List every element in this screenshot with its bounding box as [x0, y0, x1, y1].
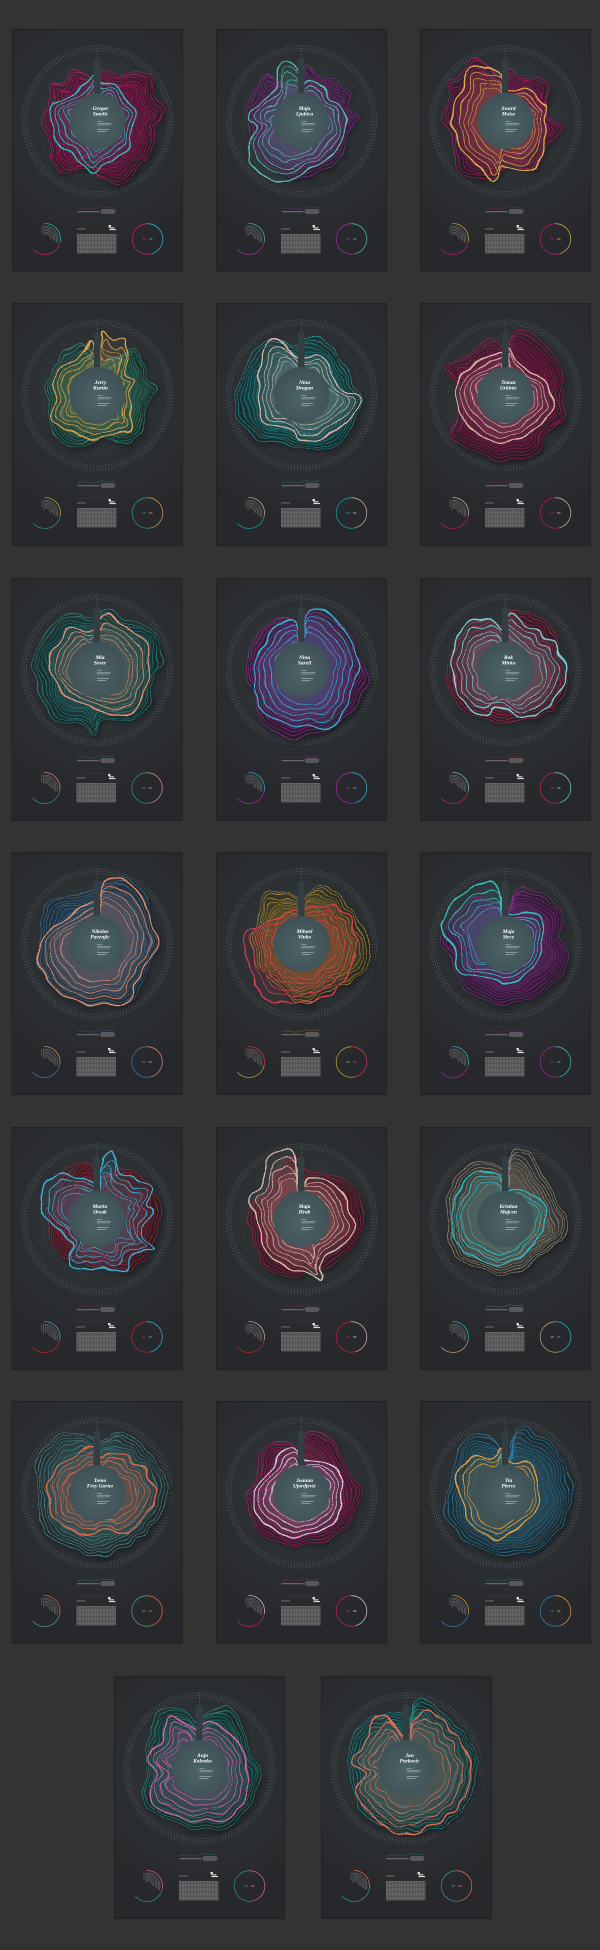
wave rings — [244, 610, 371, 740]
name: Vinko — [298, 934, 311, 940]
charts and text block — [234, 756, 367, 804]
core circle — [70, 333, 126, 423]
core circle — [274, 608, 330, 698]
name: Tomaz — [501, 380, 516, 386]
name: Nikolas — [91, 929, 109, 935]
core circle — [274, 1431, 330, 1521]
name: Ujordjevic — [293, 1484, 317, 1490]
poster: Nina S — [216, 578, 387, 821]
charts and text block — [234, 1305, 367, 1352]
poster: Tia — [420, 1401, 591, 1644]
name: Mihael — [297, 929, 312, 935]
name: Moise — [501, 112, 516, 118]
name: Joanna — [296, 1478, 313, 1484]
charts and text block — [438, 756, 571, 804]
core circle — [274, 333, 330, 423]
wave rings — [244, 886, 373, 1006]
name: Gregor — [93, 106, 108, 112]
charts and text block — [30, 481, 163, 528]
wave rings — [41, 1152, 162, 1275]
charts and text block — [30, 207, 163, 254]
poster: Maja Hrab — [216, 1127, 387, 1370]
charts and text block — [29, 1305, 162, 1352]
poster: Anja — [114, 1676, 285, 1919]
name: Maja — [299, 106, 310, 112]
charts and text block — [438, 1579, 571, 1626]
name: Tia — [505, 1478, 512, 1484]
name: Kolenko — [192, 1758, 212, 1764]
wave rings — [349, 1699, 479, 1835]
poster: Mia — [12, 578, 182, 821]
name: Kristian — [500, 1204, 517, 1210]
name: Sever — [94, 660, 107, 666]
core circle — [478, 59, 534, 149]
charts and text block — [438, 1305, 571, 1352]
core circle — [172, 1706, 228, 1796]
name: Pavenjic — [90, 934, 110, 940]
core circle — [478, 333, 534, 423]
poster: Marko — [12, 1127, 182, 1370]
name: Smolic — [93, 112, 109, 118]
core circle — [69, 608, 125, 698]
name: Grkinic — [500, 386, 518, 392]
wave rings — [441, 59, 563, 183]
wave rings — [445, 1149, 570, 1279]
core circle — [478, 1431, 534, 1521]
poster: Nikolas — [12, 852, 182, 1095]
poster: Joanna — [216, 1401, 387, 1644]
name: Nina — [299, 380, 310, 386]
wave rings — [234, 338, 364, 453]
name: Frey Gorno — [87, 1484, 113, 1490]
name: Pierce — [501, 1484, 516, 1490]
wave rings — [142, 1706, 263, 1834]
name: Mirko — [501, 660, 516, 666]
name: Jerry — [95, 380, 106, 386]
name: Maja — [299, 1204, 310, 1210]
wave rings — [247, 1151, 366, 1282]
poster: Maja — [216, 29, 387, 272]
charts and text block — [132, 1854, 265, 1902]
charts and text block — [438, 481, 571, 528]
wave rings — [446, 1428, 575, 1558]
name: Sarell — [298, 660, 312, 666]
wave rings — [36, 878, 160, 1007]
core circle — [274, 1157, 330, 1247]
poster: Kristian — [420, 1127, 591, 1370]
core circle — [274, 59, 330, 149]
wave rings — [246, 60, 360, 182]
wave rings — [35, 1432, 169, 1558]
name: Parkovic — [400, 1758, 420, 1764]
poster: Tomaz — [420, 303, 591, 546]
charts and text block — [234, 1579, 367, 1626]
poster: Jan — [321, 1676, 492, 1919]
poster: Nina D — [216, 303, 387, 546]
name: Kurtin — [92, 386, 108, 392]
charts and text block — [438, 207, 571, 254]
charts and text block — [29, 1030, 162, 1078]
name: Anja — [197, 1753, 208, 1759]
core circle — [69, 882, 125, 972]
wave rings — [447, 610, 569, 725]
name: Nina — [299, 655, 310, 661]
core circle — [69, 1431, 125, 1521]
core circle — [478, 608, 534, 698]
name: Orsak — [93, 1210, 107, 1216]
name: Sirce — [503, 934, 515, 940]
charts and text block — [29, 1579, 162, 1626]
core circle — [378, 1706, 434, 1796]
name: Dragan — [295, 386, 313, 392]
wave rings — [444, 331, 570, 464]
charts and text block — [29, 756, 162, 804]
charts and text block — [338, 1854, 472, 1902]
charts and text block — [234, 481, 367, 528]
name: Majcen — [499, 1210, 517, 1216]
name: Jan — [405, 1753, 414, 1759]
wave rings — [47, 331, 158, 451]
core circle — [478, 882, 534, 972]
core circle — [69, 1157, 125, 1247]
name: Sward — [501, 106, 516, 112]
name: Maja — [503, 929, 514, 935]
core circle — [274, 882, 330, 972]
name: Tomo — [94, 1478, 106, 1484]
poster: Mihael — [216, 852, 387, 1095]
poster: Sward — [420, 29, 591, 272]
core circle — [70, 59, 126, 149]
name: Marko — [93, 1204, 107, 1210]
poster: Maja Sirce — [420, 852, 591, 1095]
name: Hrab — [298, 1210, 311, 1216]
charts and text block — [234, 207, 367, 254]
charts and text block — [438, 1030, 571, 1078]
wave rings — [242, 1432, 362, 1548]
name: Mia — [96, 655, 104, 661]
name: Ljubica — [295, 112, 313, 118]
name: Rok — [504, 655, 513, 661]
poster: Rok — [420, 578, 591, 821]
poster: Gregor — [12, 29, 183, 272]
core circle — [478, 1157, 534, 1247]
wave rings — [31, 610, 164, 738]
poster: Tomo — [12, 1401, 182, 1644]
wave rings — [39, 70, 167, 187]
charts and text block — [234, 1030, 367, 1078]
poster: Jerry — [12, 303, 183, 546]
wave rings — [439, 883, 571, 1008]
